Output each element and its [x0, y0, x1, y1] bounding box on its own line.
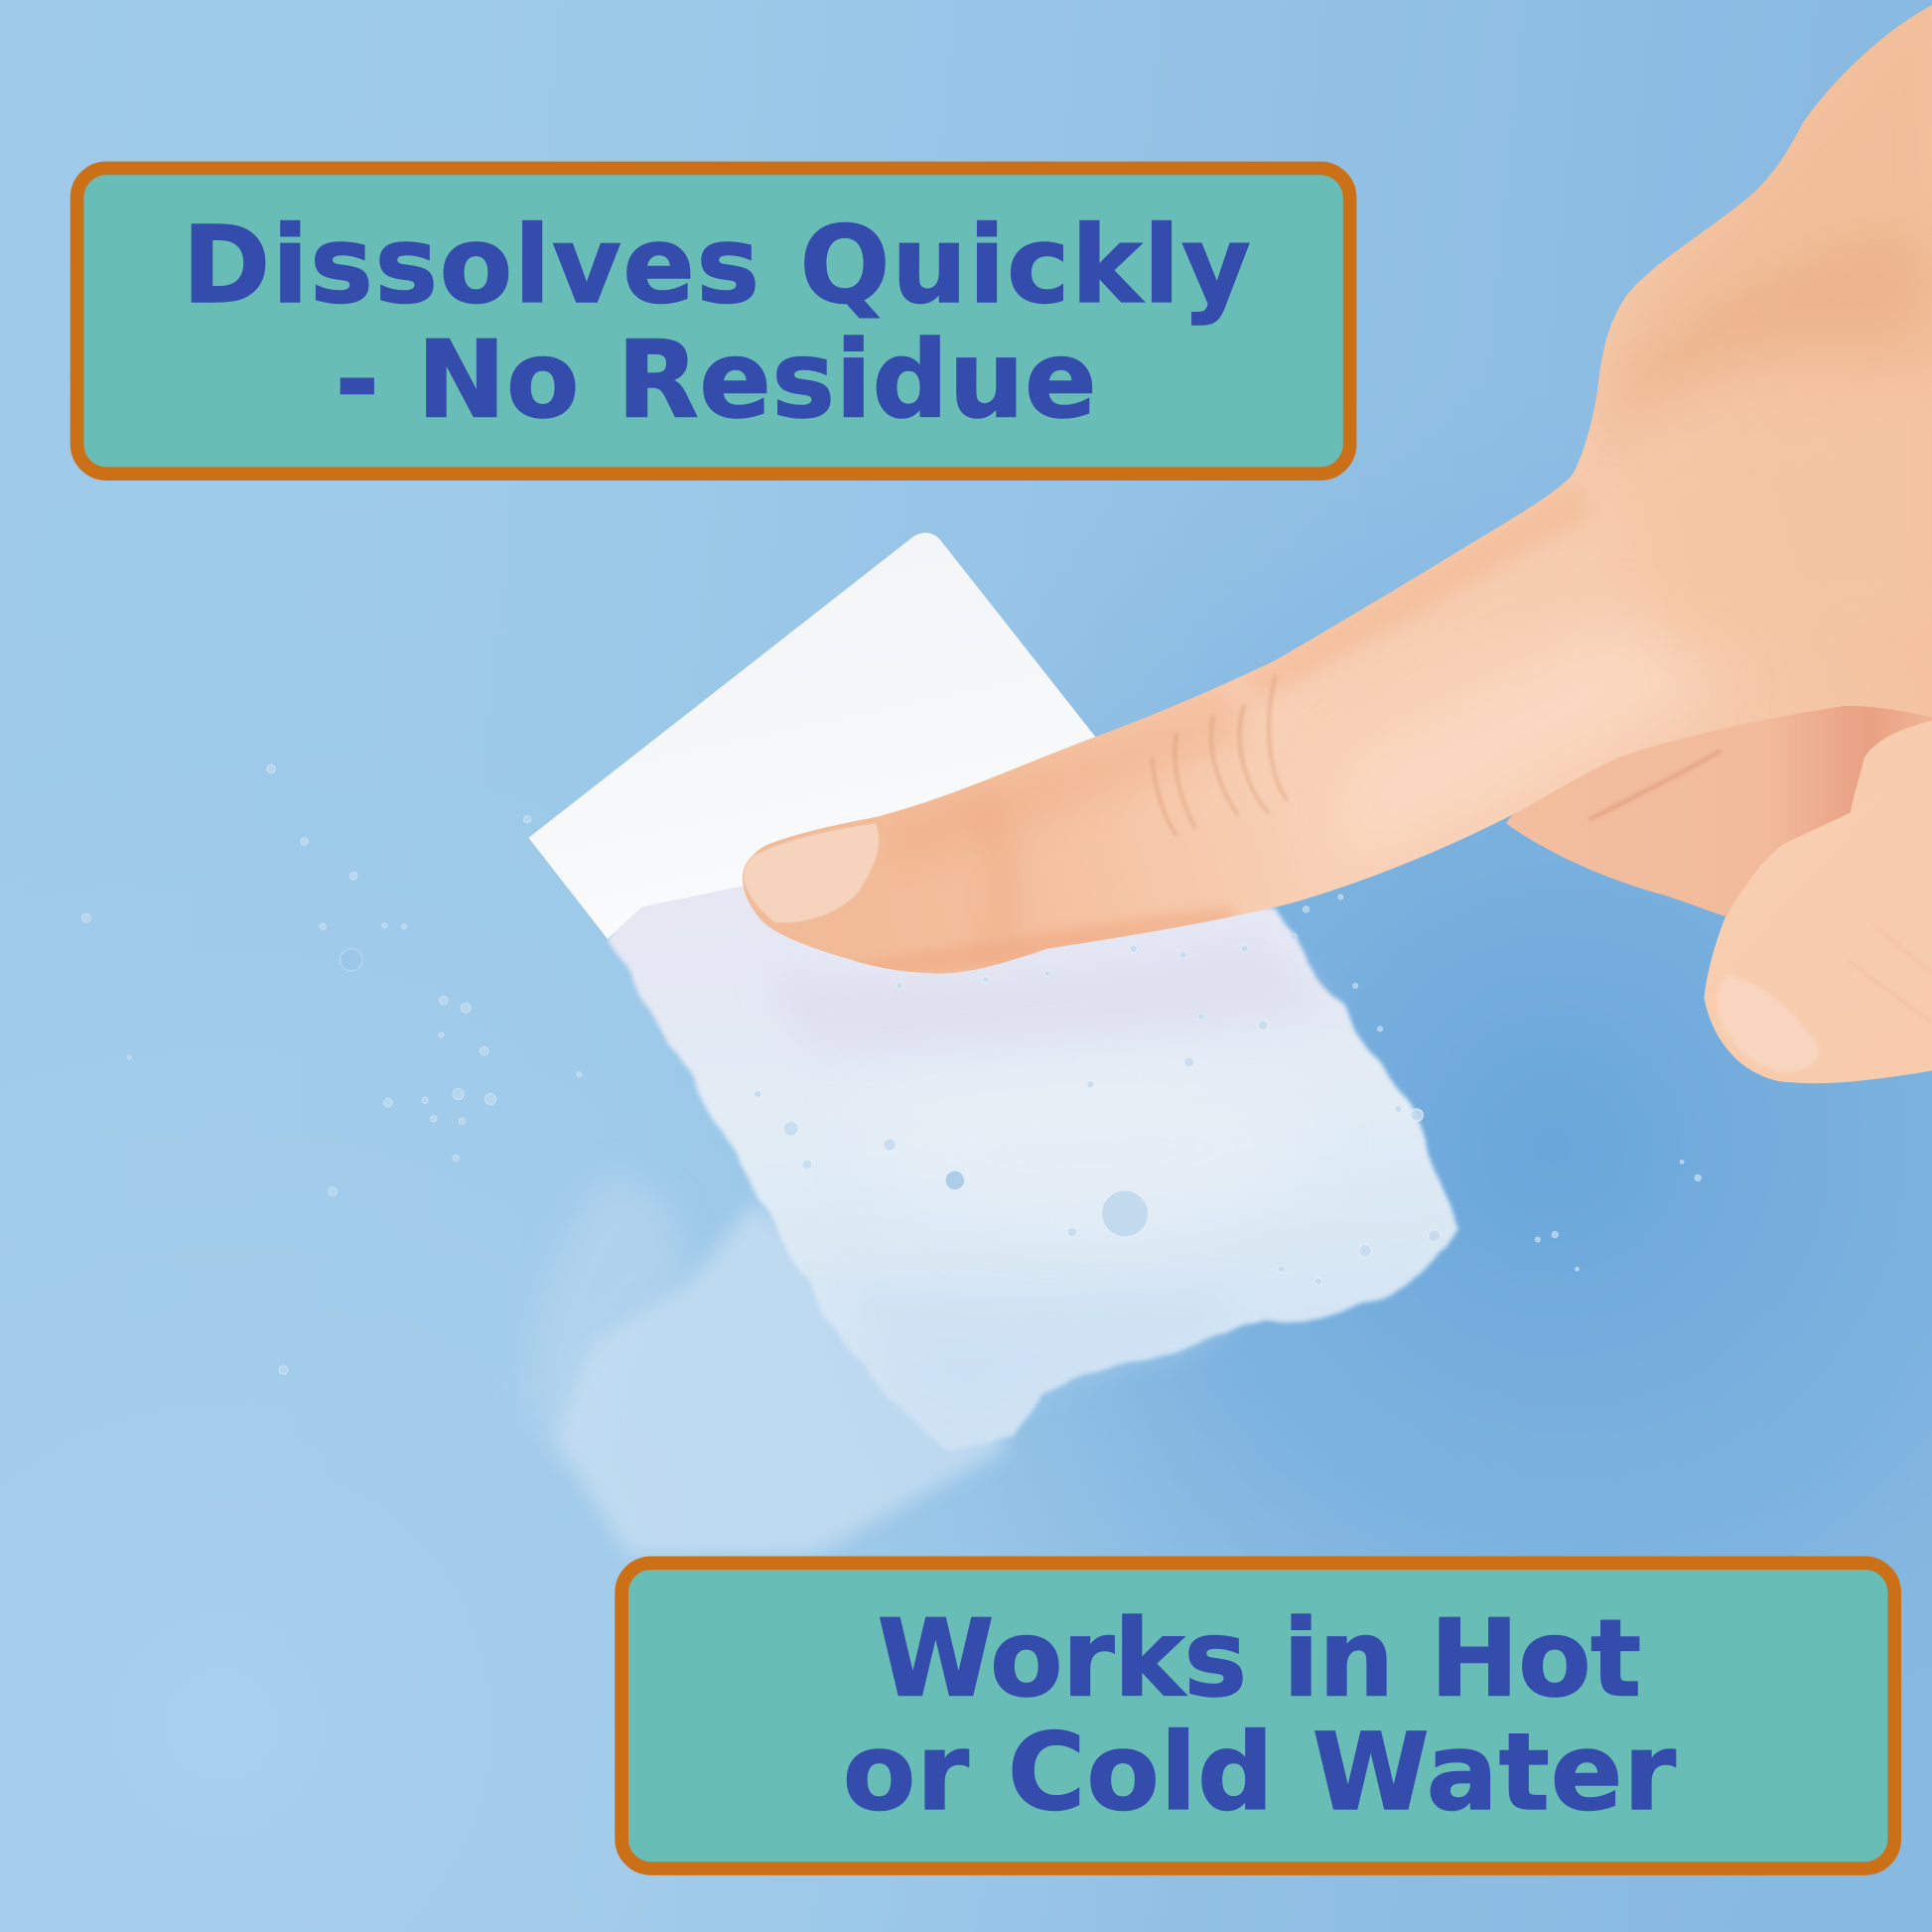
finger joint wrinkles: [1152, 675, 1288, 835]
sponge sheet: dry white part: [528, 533, 1095, 939]
sponge sheet: wet foaming part: [608, 863, 1458, 1451]
foam smear trailing below the sponge: [529, 1171, 1011, 1555]
hand: middle finger behind the index: [1506, 690, 1932, 916]
hand: thumb: [1704, 772, 1932, 1083]
callout text: dissolves quickly, no residue: - No Residue: [336, 319, 1097, 442]
hand: back of hand and pointing index finger: [743, 0, 1932, 976]
hand: second curled finger: [1849, 721, 1932, 823]
callout text: works in hot or cold water: Works in Hot: [878, 1598, 1641, 1722]
water droplets scattered on the surface: [82, 764, 1701, 1374]
callout text: works in hot or cold water: or Cold Water: [843, 1712, 1676, 1835]
fingernail: [743, 823, 880, 923]
callout text: dissolves quickly, no residue: Dissolves Quickly: [183, 205, 1251, 328]
callout panel: dissolves quickly: [77, 168, 1350, 474]
callout panel: works in hot or cold water: [621, 1563, 1894, 1868]
foam bubbles: [755, 945, 1441, 1285]
callout text: dissolves quickly, no residue: [183, 205, 1251, 442]
callout text: works in hot or cold water: [843, 1598, 1676, 1835]
knuckle shadow band: [1596, 230, 1932, 435]
